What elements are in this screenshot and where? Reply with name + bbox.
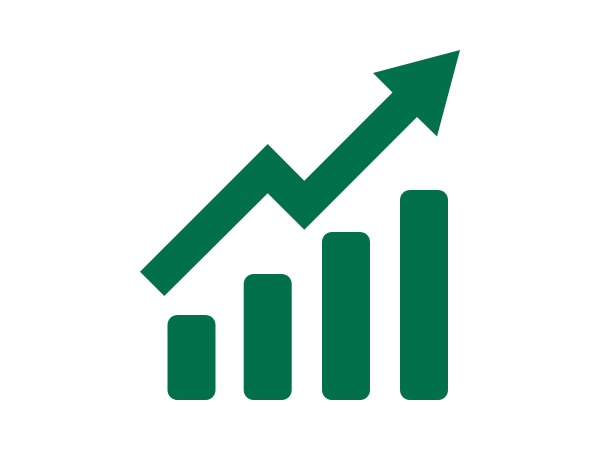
bar 2 bbox=[244, 274, 292, 400]
bar 1 bbox=[168, 315, 216, 400]
bar 4 bbox=[400, 190, 448, 400]
bar 3 bbox=[322, 232, 370, 400]
trend arrow bbox=[140, 50, 460, 296]
